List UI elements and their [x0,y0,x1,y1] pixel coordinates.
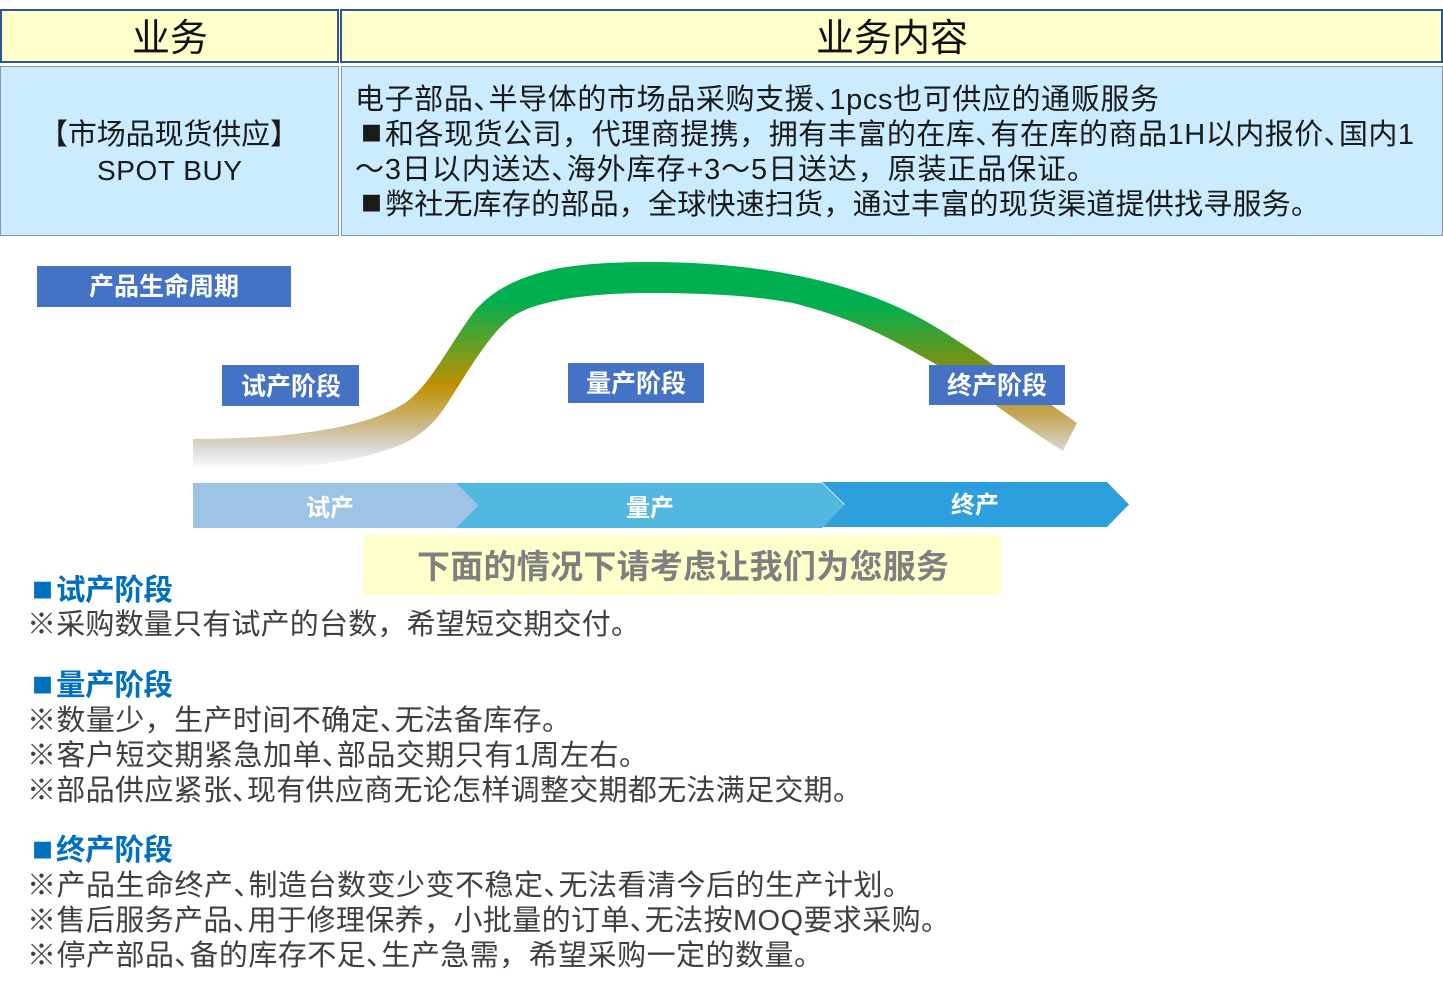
table header: business content [341,10,1442,62]
text block: trial stage: ■ [32,575,53,605]
label: end of production stage [929,365,1065,405]
table cell: service description: ■ [361,118,382,148]
text block: mass stage: 量产阶段 [56,669,173,702]
table cell: service description: 电子部品、半导体的市场品采购支援、1pcs也可供应的通贩服务 [355,83,1159,116]
table header: business: 业务 [132,18,208,60]
stage arrow: trial [193,483,478,528]
table cell: service name: 【市场品现货供应】 [39,118,299,151]
label: trial production stage: 试产阶段 [241,372,341,401]
text block: end stage: ※停产部品、备的库存不足、生产急需，希望采购一定的数量。 [27,939,823,972]
table cell: service description: 弊社无库存的部品，全球快速扫货，通过丰富的现货渠道提供找寻服务。 [385,188,1320,221]
text block: mass stage [27,669,862,807]
table header: business content: 业务内容 [816,18,968,60]
table cell: service description: 和各现货公司，代理商提携，拥有丰富的在库、有在库的商品1H以内报价、国内1 [385,118,1414,151]
table cell: service name: SPOT BUY [97,155,242,186]
label: product life cycle: 产品生命周期 [89,272,239,301]
table header: business [1,10,338,62]
table cell: service description: ■ [361,188,382,218]
stage arrow: mass: 量产 [626,495,674,522]
life cycle curve [193,262,1077,469]
label: mass production stage: 量产阶段 [586,369,686,398]
text block: mass stage: ※客户短交期紧急加单、部品交期只有1周左右。 [27,739,648,772]
text block: mass stage: ■ [32,670,53,700]
stage arrow: mass [456,483,845,528]
text block: trial stage: ※采购数量只有试产的台数，希望短交期交付。 [27,608,640,641]
text block: end stage: ※产品生命终产、制造台数变少变不稳定、无法看清今后的生产计划。 [27,869,912,902]
label: product life cycle [37,266,291,307]
callout: please consider our service: 下面的情况下请考虑让我们为您服务 [417,548,949,585]
text block: end stage [27,834,950,972]
text block: end stage: ※售后服务产品、用于修理保养，小批量的订单、无法按MOQ要求采购。 [27,904,950,937]
label: end of production stage: 终产阶段 [947,371,1047,400]
stage arrow: end: 终产 [951,492,999,519]
callout: please consider our service [363,535,1001,595]
text block: mass stage: ※部品供应紧张、现有供应商无论怎样调整交期都无法满足交期。 [27,774,862,807]
text block: end stage: ■ [32,835,53,865]
stage arrow: trial: 试产 [306,495,354,522]
table cell: service description: ～3日以内送达、海外库存+3～5日送达，原装正品保证。 [355,153,1096,186]
table cell: service description [342,66,1442,236]
table cell: service name [0,66,338,236]
stage arrow: end [822,482,1129,527]
text block: trial stage [27,574,640,641]
label: trial production stage [222,365,359,406]
label: mass production stage [568,363,704,403]
text block: trial stage: 试产阶段 [56,574,173,607]
text block: mass stage: ※数量少，生产时间不确定、无法备库存。 [27,704,571,737]
text block: end stage: 终产阶段 [56,834,173,867]
